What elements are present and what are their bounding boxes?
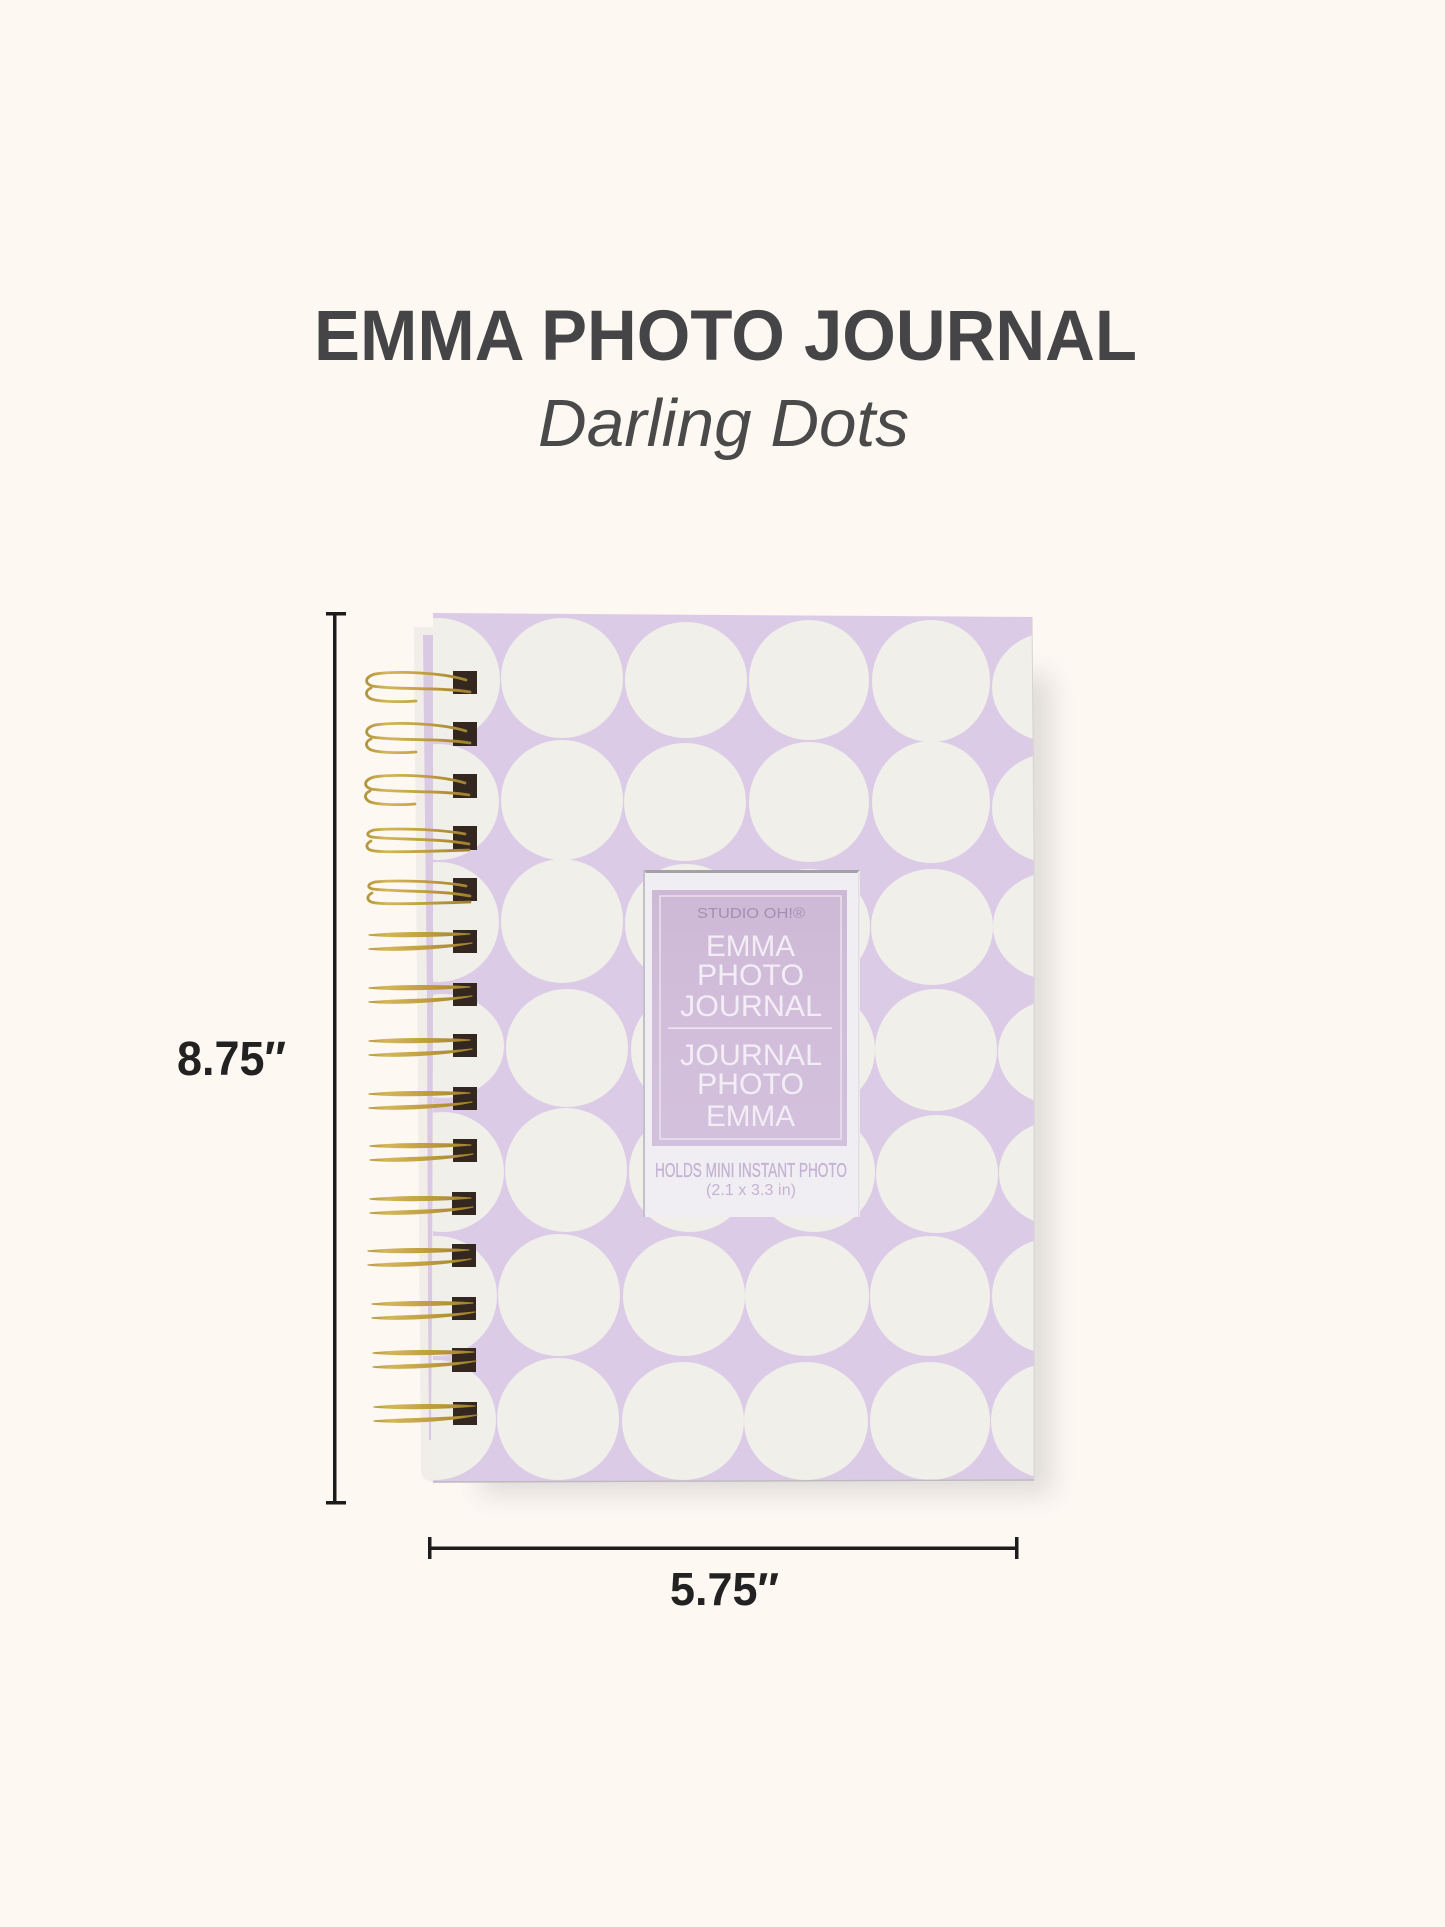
card title: JOURNAL (680, 1039, 822, 1072)
infographic canvas (178, 310, 1135, 1606)
cover (433, 613, 1034, 1482)
card title (680, 930, 822, 1133)
notebook shadow (480, 675, 1052, 1495)
photo window: (2.1 x 3.3 in) (706, 1182, 796, 1199)
back pages (414, 627, 433, 1482)
notebook (364, 613, 1034, 1483)
brand: STUDIO OH!® (697, 905, 805, 922)
width label: 5.75″ (670, 1563, 779, 1615)
polka dots (433, 618, 1034, 1480)
instant photo card (652, 890, 847, 1146)
punched holes (452, 671, 477, 1425)
height dimension line (326, 612, 346, 1504)
height label: 8.75″ (177, 1033, 286, 1086)
card title: EMMA (706, 930, 795, 963)
photo window (643, 870, 860, 1217)
width dimension line (428, 1537, 1018, 1559)
title: EMMA PHOTO JOURNAL (314, 297, 1137, 376)
card title: PHOTO (697, 959, 804, 992)
subtitle: Darling Dots (538, 386, 909, 461)
window caption: HOLDS MINI INSTANT PHOTO (655, 1160, 847, 1182)
lilac page edge (423, 635, 433, 1440)
spiral binding (365, 672, 477, 1422)
card title: JOURNAL (680, 990, 822, 1023)
card title: PHOTO (697, 1068, 804, 1101)
card title: EMMA (706, 1100, 795, 1133)
